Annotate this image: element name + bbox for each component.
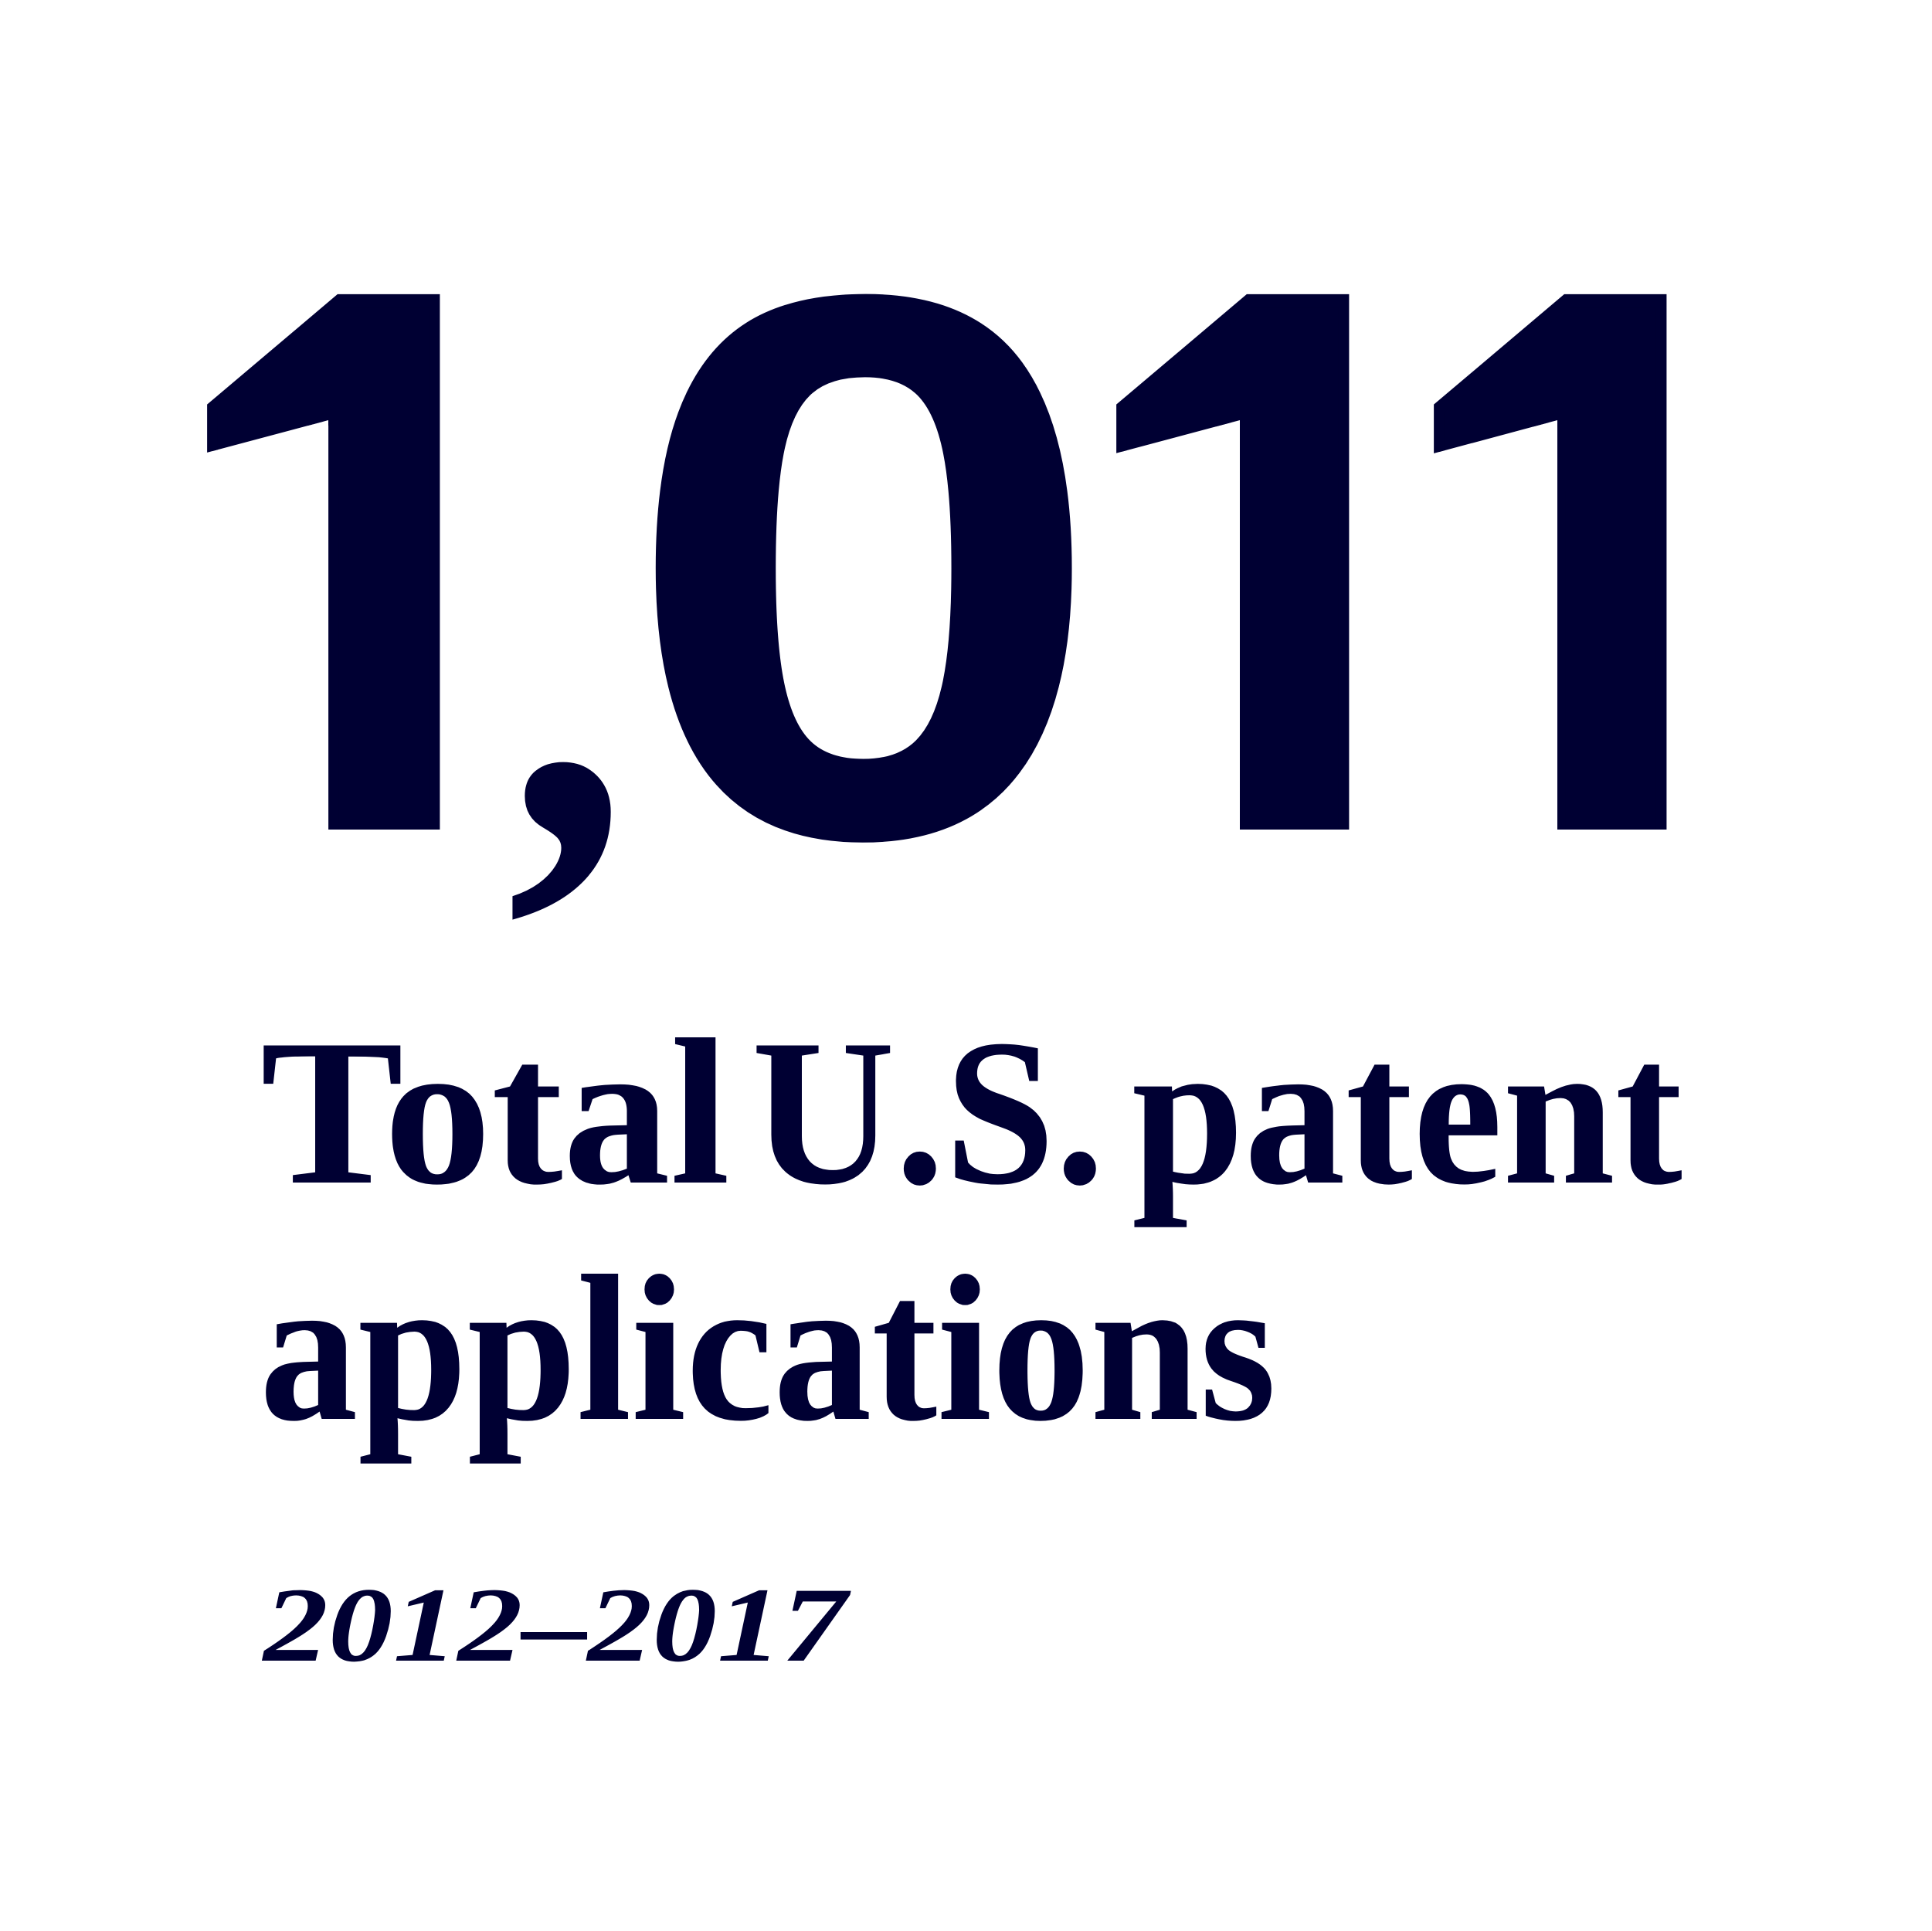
heading line 1: Total U.S. patent: patent — [1132, 996, 1685, 1228]
heading line 1: Total U.S. patent — [260, 996, 1685, 1228]
big number: 1,011: 0 — [621, 134, 1108, 999]
big number: 1,011: , — [506, 375, 630, 952]
heading line 1: Total U.S. patent: Total — [260, 996, 730, 1228]
big number: 1,011: 1 — [162, 93, 571, 1163]
date range: 2012–2017: 2012–2017 — [262, 1566, 851, 1684]
big number: 1,011: 1 — [1071, 93, 1480, 1163]
heading line 2: applications: applications — [260, 1233, 1276, 1464]
big number: 1,011: 1 — [1389, 93, 1798, 1163]
big number: 1,011 — [207, 294, 1667, 920]
heading line 1: Total U.S. patent: U.S. — [752, 996, 1105, 1228]
